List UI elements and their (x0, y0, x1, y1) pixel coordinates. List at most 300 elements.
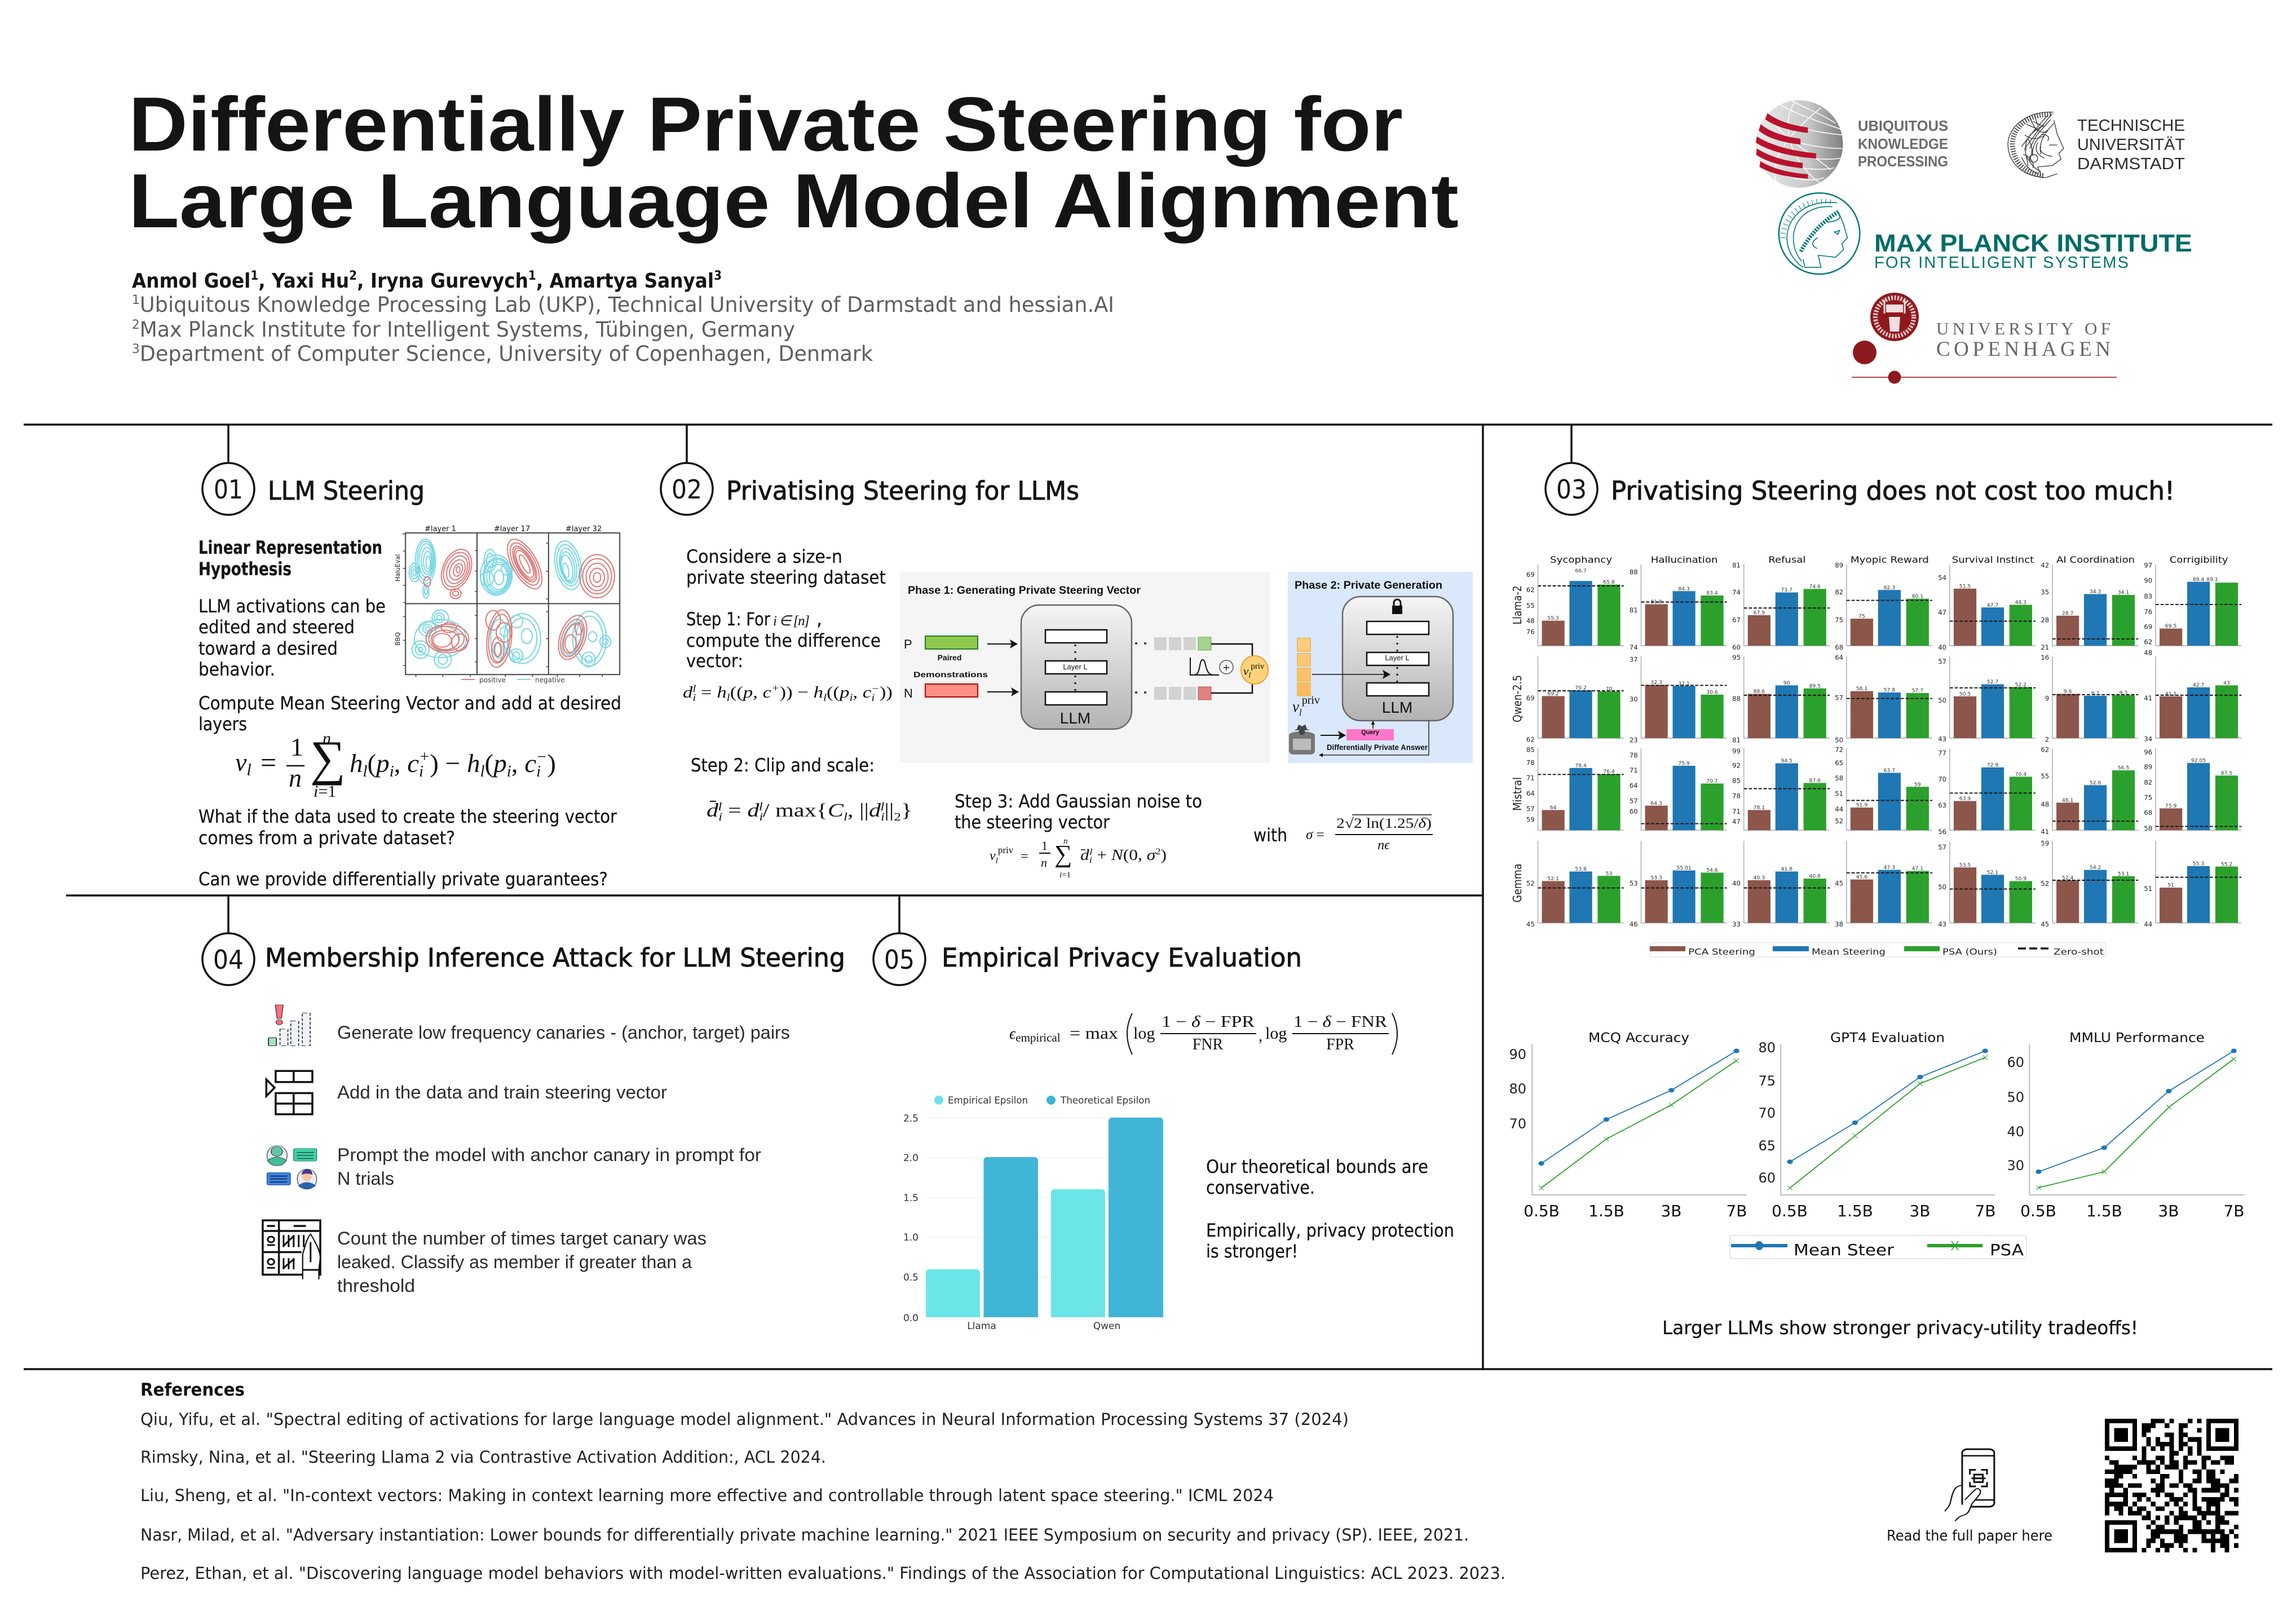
bar chart: Qwen-2.5 Survival Instinct: 52.7 (1987, 679, 1998, 685)
bar chart: Gemma Hallucination: 53 (1630, 880, 1638, 888)
line chart: GPT4 Evaluation: GPT4 Evaluation (1830, 1031, 1945, 1045)
bar chart: Llama-2 Hallucination: 81 (1630, 606, 1638, 614)
bar chart: Llama-2 AI Coordination (2041, 554, 2138, 651)
text: linear representation hypothesis: toward a desired (198, 638, 338, 659)
bar chart: Llama-2 Survival Instinct: 47.7 (1987, 602, 1998, 608)
line chart: MCQ Accuracy: 90 (1509, 1047, 1526, 1062)
bar chart: Llama-2 Corrigibility: 97 (2144, 562, 2152, 570)
affiliations: Department of Computer Science, University of Copenhagen, Denmark (140, 342, 873, 366)
logo: Technische Universität Darmstadt: TECHNISCHE (2077, 117, 2185, 135)
bar chart: Mistral Corrigibility: 68 (2144, 809, 2152, 817)
bar chart: Qwen-2.5 Survival Instinct: 50.5 (1959, 691, 1971, 697)
line chart: GPT4 Evaluation: 0.5B (1772, 1202, 1808, 1220)
formula: sigma: 2√2 ln(1.25/ δ) (1336, 816, 1432, 831)
bar chart: empirical vs theoretical epsilon: 2.0 (903, 1153, 919, 1164)
logo: Ubiquitous Knowledge Processing: KNOWLEDGE (1858, 135, 1948, 152)
text: step 2: Step 2: Clip and scale: (691, 754, 875, 776)
formula: empirical epsilon: FPR (1326, 1036, 1354, 1053)
section stub and number badge 03: 03 (1556, 474, 1587, 505)
bar chart: Gemma Survival Instinct: 50 (1938, 883, 1946, 891)
bar chart: Mistral Sycophancy: 78 (1526, 758, 1535, 766)
formula: mean steering vector: i (507, 763, 511, 780)
bar chart: Llama-2 Sycophancy: 76 (1526, 628, 1535, 636)
formula: private vector: ) (1161, 846, 1167, 863)
formula: difference vector: i (871, 692, 875, 703)
bar chart: Llama-2 Myopic Reward: Myopic Reward (1851, 554, 1929, 565)
bar chart: Mistral Sycophancy: 71 (1526, 774, 1535, 782)
references: Perez, Ethan, et al. "Discovering language model behaviors with model-written evaluations." Findings of the Association for Computational Linguistics: ACL 2023. 2023. (140, 1564, 1505, 1583)
formula: mean steering vector: i=1 (314, 782, 336, 801)
bar chart: Gemma Survival Instinct: 57 (1938, 843, 1946, 851)
bar chart: Qwen-2.5 Hallucination (1630, 655, 1727, 744)
icon: chat between robot and user (267, 1145, 317, 1189)
contour plot: negative (535, 676, 564, 684)
formula: private vector (990, 837, 1167, 880)
bar chart: empirical vs theoretical epsilon: 0.5 (903, 1272, 919, 1283)
references (140, 1380, 1505, 1583)
formula: difference vector: = (696, 683, 717, 701)
formula: clip and scale: / max{ (763, 800, 828, 821)
formula: mean steering vector: i (419, 763, 423, 780)
bar chart: Mistral Hallucination: 75.9 (1678, 760, 1690, 766)
bar chart: Mistral Refusal: 92 (1732, 761, 1741, 769)
formula: clip and scale: d (747, 800, 757, 821)
bar chart: Mistral Sycophancy: 85 (1526, 746, 1535, 754)
line chart: MCQ Accuracy: 80 (1509, 1081, 1526, 1097)
logo: Technische Universität Darmstadt (2008, 112, 2185, 178)
bar chart: Gemma Refusal: 40.6 (1809, 873, 1821, 880)
bar chart: Mistral AI Coordination: 41 (2041, 828, 2049, 836)
bar chart: Mistral Myopic Reward: 52 (1835, 817, 1843, 825)
references: Rimsky, Nina, et al. "Steering Llama 2 via Contrastive Activation Addition:, ACL 2024. (140, 1448, 826, 1467)
bar chart: Mistral Refusal: 94.5 (1781, 758, 1792, 764)
bar chart: Llama-2 Refusal: Refusal (1768, 554, 1805, 565)
bar chart: Llama-2 AI Coordination: 34.1 (2118, 590, 2129, 596)
bar chart: Gemma Corrigibility: 55.3 (2193, 860, 2204, 867)
text: private dataset questions: What if the data used to create the steering vector (198, 806, 617, 827)
formula: private vector: ∑ (1054, 840, 1072, 868)
section stub and number badge 01: 01 (214, 474, 243, 505)
formula: empirical epsilon: FNR (1193, 1036, 1224, 1053)
bar chart: Llama-2 AI Coordination: 42 (2041, 562, 2049, 570)
line chart: MMLU Performance: 40 (2007, 1124, 2024, 1140)
diagram: Phase 1 generating private steering vector: N (904, 686, 913, 700)
diagram: Phase 1 generating private steering vector: Phase 1: Generating Private Steering Vector (908, 585, 1141, 597)
bar chart: Llama-2 Survival Instinct: 54 (1938, 573, 1946, 581)
formula: clip and scale: l (844, 811, 848, 823)
formula: difference vector: (( (730, 683, 743, 701)
bar chart: Mistral Hallucination: 64.3 (1650, 800, 1662, 806)
formula: private vector: = (1021, 849, 1028, 864)
diagram: Phase 2 private generation: Differentially Private Answer (1327, 743, 1428, 752)
bar chart: Mistral Hallucination: 60 (1630, 807, 1638, 815)
bar chart: Qwen-2.5 Survival Instinct: 50 (1938, 696, 1946, 704)
authors: 1 (528, 269, 536, 283)
bar chart: Mistral Refusal: 47 (1732, 818, 1741, 826)
line chart: MMLU Performance: 30 (2007, 1158, 2024, 1173)
formula: empirical epsilon: log (1265, 1024, 1287, 1043)
line chart: MCQ Accuracy: 70 (1509, 1116, 1526, 1132)
line chart: MCQ Accuracy: 3B (1661, 1202, 1682, 1220)
formula: mean steering vector: ( (485, 749, 493, 778)
logo: Max Planck Institute (1779, 193, 2192, 274)
bar chart: Gemma Hallucination: 46 (1630, 920, 1638, 928)
bar chart: Qwen-2.5 AI Coordination: 9.2 (2091, 690, 2099, 696)
bar chart: Llama-2 AI Coordination: 28.7 (2062, 610, 2074, 616)
icon: phone scanning QR (1945, 1449, 1994, 1521)
bar chart: Mistral Survival Instinct: 70.4 (2015, 771, 2026, 778)
line chart: MCQ Accuracy: 1.5B (1588, 1202, 1624, 1220)
bar chart: Mistral Myopic Reward: 72 (1835, 746, 1843, 754)
bar chart: Qwen-2.5 Corrigibility: 42.7 (2193, 682, 2204, 688)
formula: private vector: n (1041, 855, 1047, 870)
bar chart: Qwen-2.5 Hallucination: 30.6 (1706, 689, 1718, 695)
formula: difference vector: l (727, 692, 730, 703)
section stub and number badge 04 (202, 895, 254, 985)
formula: sigma: with (1253, 824, 1287, 846)
formula: clip and scale (707, 800, 912, 823)
formula: difference vector: i (692, 692, 696, 703)
bar chart: empirical vs theoretical epsilon: 0.0 (903, 1313, 919, 1324)
bar chart: Qwen-2.5 Survival Instinct: 57 (1938, 657, 1946, 665)
heading: Empirical Privacy Evaluation: Empirical Privacy Evaluation (942, 943, 1302, 973)
bar chart: Mistral Hallucination: 71 (1630, 766, 1638, 774)
text: linear representation hypothesis: Hypothesis (198, 558, 292, 580)
formula: empirical epsilon: empirical (1015, 1031, 1061, 1044)
bar chart: Qwen-2.5 Refusal: 81 (1732, 736, 1741, 744)
heading: Privatising Steering for LLMs: Privatising Steering for LLMs (726, 476, 1079, 506)
bar chart: Mistral AI Coordination: 55 (2041, 773, 2049, 780)
line chart: GPT4 Evaluation (1758, 1031, 1996, 1220)
line chart: GPT4 Evaluation: 7B (1975, 1202, 1996, 1220)
bar chart: Gemma Myopic Reward (1835, 841, 1932, 928)
bar chart: Gemma Myopic Reward: 38 (1835, 920, 1843, 928)
line chart: GPT4 Evaluation: 3B (1909, 1202, 1931, 1220)
bar chart: Llama-2 Refusal: 67 (1732, 616, 1741, 624)
bar chart: Mistral Hallucination: 78 (1630, 751, 1638, 759)
contour plot: HaluEval (394, 554, 401, 581)
logo: Technische Universität Darmstadt: UNIVERSITÄT (2077, 136, 2185, 154)
line chart: MMLU Performance: 7B (2223, 1202, 2245, 1220)
bar chart: Llama-2 Sycophancy: 69 (1526, 571, 1535, 579)
text: steps 0 and 1: compute the difference (686, 630, 881, 651)
formula: mean steering vector: v (235, 748, 246, 776)
text: count leakage: Count the number of times target canary was (337, 1228, 707, 1248)
text: step 3 (955, 791, 1202, 833)
text: add data: Add in the data and train steering vector (337, 1082, 667, 1102)
bar chart: Qwen-2.5 Corrigibility (2144, 649, 2241, 743)
legend: bar charts: Mean Steering (1812, 947, 1886, 957)
references: Qiu, Yifu, et al. "Spectral editing of activations for large language model alignment." Advances in Neural Information Processing Systems 37 (2024) (140, 1410, 1349, 1429)
bar chart: Qwen-2.5 Corrigibility: 48 (2144, 649, 2152, 657)
bar chart: Mistral Survival Instinct: 77 (1938, 749, 1946, 757)
icon: hacker (1289, 725, 1315, 754)
bar chart: Qwen-2.5 Hallucination: 30 (1630, 695, 1638, 703)
bar chart: Gemma AI Coordination: 45 (2041, 920, 2049, 928)
formula: mean steering vector: n (289, 764, 302, 792)
frame lines (24, 425, 2272, 1369)
bar chart: Qwen-2.5 Sycophancy: 69 (1526, 694, 1535, 702)
line chart: GPT4 Evaluation: 60 (1758, 1170, 1776, 1186)
bar chart: Llama-2 Hallucination: 88 (1630, 568, 1638, 576)
bar chart: Gemma Corrigibility: 55.2 (2221, 861, 2232, 867)
formula: difference vector: )) − (780, 683, 814, 701)
bar chart: Llama-2 Refusal: 81 (1732, 562, 1741, 570)
bar chart: Qwen-2.5 Refusal (1732, 654, 1830, 744)
bar chart: Qwen-2.5 Refusal: 88.6 (1754, 689, 1765, 695)
bar chart: Gemma Hallucination (1630, 841, 1727, 928)
formula: clip and scale: || (884, 800, 894, 821)
formula: mean steering vector: ) (547, 749, 556, 778)
formula: mean steering vector: ∑ (310, 731, 346, 786)
bar chart: Qwen-2.5 Refusal: 89.5 (1809, 683, 1821, 689)
text: private dataset questions: comes from a private dataset? (198, 827, 455, 849)
diagram: Phase 2 private generation: LLM (1382, 699, 1412, 716)
formula: mean steering vector: , (511, 749, 524, 778)
bar chart: Qwen-2.5 Hallucination: 37 (1630, 655, 1638, 663)
bar chart: Llama-2 Myopic Reward: 89 (1835, 562, 1843, 570)
text: linear representation hypothesis: LLM activations can be (198, 595, 386, 617)
formula: empirical epsilon: log (1133, 1024, 1155, 1043)
diagram: Phase 1 generating private steering vector: P (904, 637, 912, 651)
line chart: GPT4 Evaluation: 65 (1758, 1138, 1776, 1154)
bar chart: Qwen-2.5 Corrigibility: 41.1 (2165, 691, 2176, 697)
affiliations: 2 (132, 318, 140, 332)
formula: difference vector: − (871, 683, 880, 694)
bar chart: Gemma Hallucination: 55.01 (1676, 865, 1692, 871)
bar chart: Llama-2 Sycophancy: 48 (1526, 617, 1535, 625)
formula: clip and scale: l (881, 801, 885, 813)
bar chart: Llama-2 Survival Instinct: 51.5 (1959, 583, 1971, 589)
bar chart: Llama-2 Refusal: 67.9 (1754, 610, 1765, 616)
panel: 04 Membership Inference Attack (202, 895, 845, 1296)
bar chart: Llama-2 Corrigibility: 89.1 (2206, 576, 2218, 582)
text: linear representation hypothesis: edited and steered (198, 616, 355, 638)
section stub and number badge 05 (873, 895, 925, 985)
bar chart: empirical vs theoretical epsilon: 1.5 (903, 1193, 919, 1204)
section stub and number badge 02 (661, 425, 713, 515)
bar chart: Gemma Corrigibility: 44 (2144, 920, 2152, 928)
bar chart: Qwen-2.5 Refusal: 88 (1732, 695, 1741, 703)
bar chart: Mistral Sycophancy: 64 (1526, 789, 1535, 797)
affiliations (132, 293, 1114, 366)
contour plot: #layer 32 (566, 525, 602, 533)
formula: difference vector: l (692, 683, 696, 694)
bar chart: Gemma Corrigibility (2144, 841, 2241, 928)
cyan and red contours, bottom row (412, 610, 611, 668)
bar chart: Mistral Myopic Reward: 63.7 (1884, 767, 1895, 774)
bar chart: Llama-2 Myopic Reward (1835, 554, 1932, 651)
bar chart: Gemma Myopic Reward: 45.6 (1856, 874, 1867, 880)
formula: sigma (1253, 815, 1433, 853)
text: prompt model: N trials (337, 1168, 394, 1189)
bar chart: Mistral Sycophancy: 64 (1550, 805, 1557, 811)
legend: line charts (1730, 1235, 2026, 1259)
formula: empirical epsilon: ϵ (1009, 1025, 1015, 1043)
formula: sigma: σ = (1306, 827, 1324, 842)
bar chart: Llama-2 AI Coordination: 28 (2041, 616, 2049, 624)
bar chart: Llama-2 Refusal (1732, 554, 1830, 651)
bar chart: Mistral Refusal: 85 (1732, 776, 1741, 784)
bar chart: Gemma AI Coordination: 59 (2041, 839, 2049, 847)
cyan and red contours, top row (409, 539, 585, 598)
title: Differentially Private Steering for (129, 81, 1403, 167)
formula: clip and scale: l (759, 801, 763, 813)
bar chart: Llama-2 Sycophancy: 55.3 (1547, 615, 1559, 621)
formula: mean steering vector: l (246, 761, 251, 779)
authors: Anmol Goel (132, 270, 263, 293)
formula: mean steering vector: c (524, 749, 536, 778)
bar chart: Mistral Corrigibility: 87.5 (2221, 770, 2232, 776)
formula: private vector: l (1089, 848, 1093, 857)
QR code (2105, 1421, 2238, 1550)
authors: 1 (250, 269, 258, 283)
bar chart: Llama-2 AI Coordination: 35 (2041, 588, 2049, 596)
bar chart: empirical vs theoretical epsilon: Llama (967, 1321, 996, 1332)
logo: University of Copenhagen: UNIVERSITY OF (1936, 319, 2110, 338)
formula: private vector: v (990, 849, 996, 863)
bar chart: empirical vs theoretical epsilon: 2.5 (903, 1113, 919, 1124)
bar chart: Mistral Corrigibility: 82 (2144, 778, 2152, 786)
bar chart: Llama-2 Sycophancy: 66.7 (1575, 568, 1587, 574)
bar chart: Gemma AI Coordination: 53.1 (2118, 871, 2129, 877)
bar chart: Llama-2 Myopic Reward: 68 (1835, 643, 1843, 651)
legend: bar charts: PSA (Ours) (1942, 947, 1997, 957)
text: steps 0 and 1: i ∈ [n] (773, 614, 810, 629)
text: linear representation hypothesis (198, 537, 621, 735)
text: count leakage: leaked. Classify as member if greater than a (337, 1252, 692, 1272)
contour plot: BBQ (394, 632, 401, 646)
row labels: Qwen-2.5 (1511, 675, 1524, 722)
bar chart: Mistral Hallucination: 70.7 (1706, 778, 1718, 784)
text: steps 0 and 1: Considere a size-n (686, 546, 842, 567)
bar chart: Gemma Refusal: 33 (1732, 920, 1741, 928)
bar chart: Llama-2 Corrigibility: 69 (2144, 623, 2152, 631)
bar chart: Gemma Corrigibility: 51 (2167, 882, 2174, 889)
bar chart: Llama-2 Refusal: 60 (1732, 643, 1741, 651)
formula: difference vector: p, c (743, 683, 767, 701)
bar chart: Mistral Refusal: 99 (1732, 747, 1741, 755)
bar chart: Qwen-2.5 Myopic Reward: 50 (1835, 736, 1843, 744)
bar chart: Gemma Refusal (1732, 841, 1830, 928)
bar chart: Mistral Hallucination: 57 (1630, 797, 1638, 805)
text: step 3: Step 3: Add Gaussian noise to (955, 791, 1202, 812)
bar chart: Gemma Survival Instinct: 52.1 (1987, 870, 1998, 876)
section stub and number badge 05: 05 (884, 945, 915, 975)
formula: clip and scale: d (869, 800, 878, 821)
authors: , Yaxi Hu (258, 270, 349, 293)
text: conclusions (1206, 1156, 1454, 1262)
icon: canaries bars (268, 1005, 310, 1046)
formula: difference vector: i (849, 692, 853, 703)
text: conclusions: conservative. (1206, 1177, 1315, 1198)
bar chart: Llama-2 Sycophancy: 62 (1526, 586, 1535, 594)
diagram: Phase 1 generating private steering vector: Demonstrations (913, 670, 988, 679)
bar chart: Qwen-2.5 AI Coordination: 9.6 (2064, 689, 2072, 695)
formula: mean steering vector: ( (368, 749, 376, 778)
formula: clip and scale: 2 (894, 811, 901, 823)
bar chart: Mistral Refusal: 71 (1732, 807, 1741, 815)
formula: clip and scale: , || (847, 800, 869, 821)
bar chart: Gemma Refusal: 40.3 (1754, 875, 1765, 881)
formula: private vector: + (1092, 846, 1111, 863)
text: prompt model: Prompt the model with anchor canary in prompt for (337, 1145, 761, 1165)
bar chart: Llama-2 Refusal: 74.6 (1809, 584, 1821, 590)
bar chart: Qwen-2.5 Refusal: 90 (1783, 680, 1790, 686)
formula: difference vector: p (840, 683, 848, 701)
line chart: MCQ Accuracy: MCQ Accuracy (1588, 1031, 1689, 1045)
bar chart: Qwen-2.5 Sycophancy: 70.2 (1575, 685, 1587, 691)
authors: , Amartya Sanyal (536, 270, 714, 293)
bar chart: Llama-2 Hallucination (1630, 554, 1727, 651)
bar chart: Mistral Corrigibility: 92.05 (2191, 758, 2206, 764)
formula: mean steering vector: = (260, 747, 276, 778)
text: steps 0 and 1: Step 1: For (686, 608, 771, 630)
bar chart: Qwen-2.5 Myopic Reward: 58.1 (1856, 686, 1867, 692)
diagram: Phase 1 generating private steering vector: l (1248, 672, 1251, 680)
logo: Technische Universität Darmstadt: DARMSTADT (2077, 155, 2185, 173)
bar chart: Qwen-2.5 Myopic Reward: 57 (1835, 694, 1843, 702)
bar chart: Qwen-2.5 Hallucination: 32.3 (1650, 679, 1662, 686)
bar chart: Gemma Sycophancy: 45 (1526, 920, 1535, 928)
bar chart: Llama-2 Hallucination: 81.8 (1650, 599, 1662, 605)
bar chart: Mistral Corrigibility: 58 (2144, 824, 2152, 832)
bar chart: Llama-2 Hallucination: 74 (1630, 643, 1638, 651)
bar chart: Llama-2 Myopic Reward: 80.1 (1912, 593, 1923, 599)
bar chart: Mistral AI Coordination: 52.6 (2090, 780, 2101, 786)
formula: mean steering vector: n (323, 729, 331, 748)
bar chart: Mistral AI Coordination: 62 (2041, 746, 2049, 754)
bar chart: Llama-2 Hallucination: 84.3 (1678, 586, 1690, 592)
bar chart: Mistral Myopic Reward: 51.9 (1856, 802, 1867, 809)
bar chart: Llama-2 Sycophancy: 55 (1526, 602, 1535, 610)
diagram: Phase 1 generating private steering vector: LLM (1060, 709, 1090, 727)
line chart: GPT4 Evaluation: 75 (1758, 1073, 1776, 1089)
bar chart: Mistral Survival Instinct: 56 (1938, 828, 1946, 836)
bar chart: Llama-2 Myopic Reward: 82 (1835, 588, 1843, 596)
bar chart: Mistral Survival Instinct: 63 (1938, 801, 1946, 809)
contour plot: #layer 1 (425, 525, 456, 533)
bar chart: Mistral Survival Instinct: 63.9 (1959, 796, 1971, 802)
row labels: Gemma (1511, 864, 1524, 902)
formula: difference vector: h (814, 683, 822, 701)
diagram: Phase 2 private generation: Phase 2: Private Generation (1295, 580, 1442, 592)
bar chart: Gemma AI Coordination: 52.4 (2062, 875, 2074, 881)
bar chart: Mistral Myopic Reward: 65 (1835, 759, 1843, 767)
line chart: MMLU Performance: 0.5B (2020, 1202, 2056, 1220)
text: prompt model (337, 1145, 761, 1189)
section stub and number badge 02: 02 (672, 474, 702, 505)
bar chart: Llama-2 Refusal: 73.7 (1781, 587, 1792, 593)
references: Liu, Sheng, et al. "In-context vectors: Making in context learning more effective and controllable through latent space steering." ICML 2024 (140, 1486, 1274, 1505)
bar chart: Llama-2 Myopic Reward: 75 (1835, 616, 1843, 624)
bar chart: Mistral Myopic Reward: 59 (1914, 782, 1921, 788)
text: steps 0 and 1 (686, 546, 886, 672)
bar chart: Qwen-2.5 Sycophancy: 70 (1606, 686, 1613, 692)
text: steps 0 and 1: , (816, 608, 822, 630)
bar chart: Mistral Myopic Reward: 44 (1835, 805, 1843, 813)
panel: 01 LLM Steering (198, 425, 621, 890)
logo: University of Copenhagen (1852, 293, 2117, 383)
formula: mean steering vector: 1 (290, 732, 303, 761)
formula: clip and scale: } (901, 800, 912, 821)
text: generate canaries: Generate low frequency canaries - (anchor, target) pairs (337, 1022, 790, 1043)
bar chart: Gemma Survival Instinct: 53.5 (1959, 862, 1971, 868)
bar chart: Qwen-2.5 AI Coordination: 9 (2045, 695, 2049, 703)
line chart: MMLU Performance: 3B (2158, 1202, 2179, 1220)
line chart: MMLU Performance: 1.5B (2086, 1202, 2122, 1220)
logo: Max Planck Institute: FOR INTELLIGENT SYSTEMS (1874, 254, 2129, 272)
